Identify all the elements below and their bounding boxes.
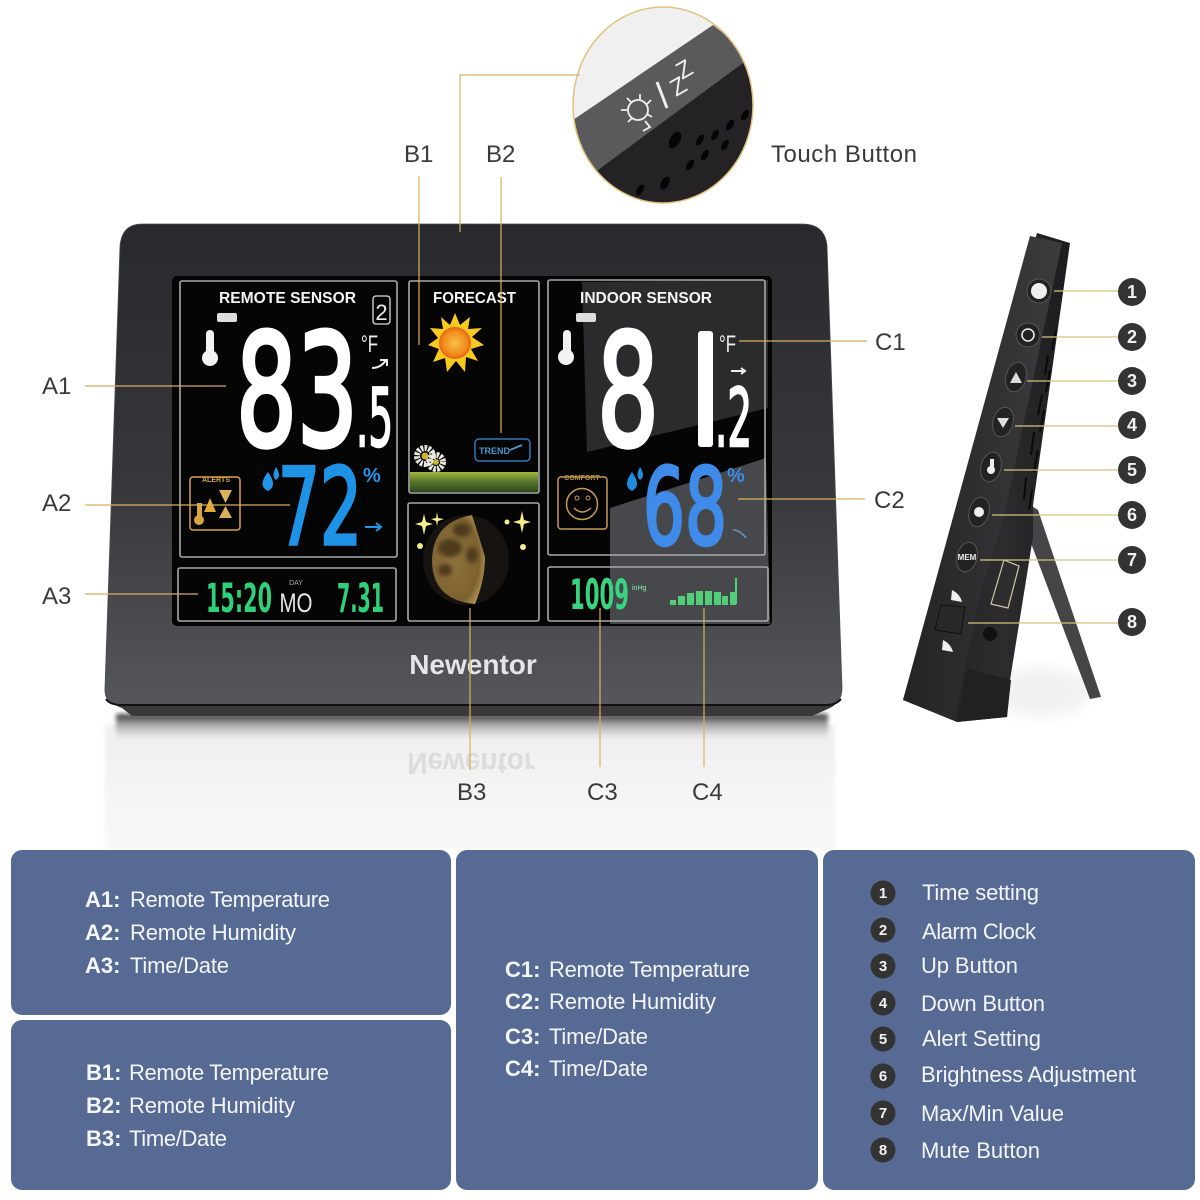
rising arrow	[372, 360, 387, 368]
icon: stars	[415, 511, 531, 550]
legend row 2: 2	[879, 922, 887, 939]
legend row 5	[870, 1026, 1041, 1052]
indoor humidity value: 68	[643, 446, 727, 569]
battery icon	[217, 313, 237, 322]
indoor temperature second digit	[698, 331, 713, 447]
button callouts	[968, 278, 1146, 636]
callout 8	[1118, 608, 1146, 636]
icon: grass	[410, 472, 538, 492]
panel: remote sensor	[180, 281, 397, 569]
legend row 5: Alert Setting	[922, 1026, 1041, 1051]
label B2: B2	[486, 141, 515, 168]
legend row 2: Alarm Clock	[922, 919, 1037, 944]
C2 row: C2:	[505, 989, 540, 1014]
day label: DAY	[289, 580, 303, 587]
callout 5: 5	[1127, 460, 1137, 480]
sleep letters	[666, 54, 698, 102]
B1 row: Remote Temperature	[129, 1060, 329, 1085]
trend icon: TREND	[479, 446, 510, 456]
C4 row: Time/Date	[549, 1056, 648, 1081]
legend row 1: Time setting	[922, 880, 1039, 905]
degree F: °F	[719, 331, 736, 358]
A1 row: A1:	[85, 887, 120, 912]
humidity drops	[627, 467, 643, 491]
label A3: A3	[42, 583, 71, 610]
button 6 brightness	[965, 495, 993, 529]
channel 2 icon	[373, 296, 390, 325]
degree F: °F	[361, 331, 378, 358]
C4 row	[505, 1056, 648, 1081]
panel: forecast	[409, 281, 539, 493]
callout 6	[1118, 501, 1146, 529]
pressure history bars	[670, 578, 737, 605]
legend row 8	[870, 1138, 1040, 1163]
stand leg	[1026, 505, 1101, 699]
mute switch	[935, 590, 965, 652]
weather station front	[105, 224, 842, 716]
side view floor shadow	[990, 668, 1090, 716]
A3 row: A3:	[85, 953, 120, 978]
steady arrow	[731, 368, 745, 374]
button 7 memory: MEM	[958, 553, 977, 562]
label A1: A1	[42, 373, 71, 400]
brand name: Newentor	[409, 649, 537, 680]
floor reflection	[105, 714, 835, 850]
button 3 up	[1002, 360, 1030, 394]
A2 row: A2:	[85, 920, 120, 945]
panel: time and date: 7.31	[337, 576, 384, 622]
percent sign: %	[363, 465, 381, 487]
callout 3: 3	[1127, 371, 1137, 391]
label A2: A2	[42, 490, 71, 517]
panel: button legend	[823, 850, 1195, 1190]
A1 row: Remote Temperature	[130, 887, 330, 912]
B3 row: Time/Date	[129, 1126, 227, 1151]
steady arrow	[365, 523, 381, 531]
device body	[105, 224, 842, 705]
speaker holes	[634, 108, 751, 197]
callout 2: 2	[1127, 327, 1137, 347]
lens contents	[574, 8, 752, 202]
label B3: B3	[457, 779, 486, 806]
legend row 6: 6	[879, 1068, 887, 1085]
legend row 3	[870, 953, 1018, 978]
legend row 3: 3	[879, 958, 887, 975]
label C3: C3	[587, 779, 618, 806]
remote sensor heading: REMOTE SENSOR	[219, 290, 356, 307]
button 1 clock	[1027, 279, 1051, 303]
legend row 4	[870, 990, 1045, 1016]
battery icon	[576, 313, 596, 322]
alerts icon	[190, 477, 240, 530]
B3 row: B3:	[86, 1126, 121, 1151]
legend row 6: Brightness Adjustment	[921, 1062, 1136, 1087]
C1 row: C1:	[505, 957, 540, 982]
callout 4	[1118, 411, 1146, 439]
button 2 alarm	[1016, 323, 1040, 347]
touch button magnifier	[572, 6, 754, 204]
percent sign: %	[727, 465, 745, 487]
legend row 7: 7	[879, 1105, 887, 1122]
B3 row	[86, 1126, 227, 1151]
icon: daisies	[417, 448, 443, 469]
A3 row	[85, 953, 229, 978]
callout 4: 4	[1127, 415, 1137, 435]
callout 2	[1118, 323, 1146, 351]
panel: pressure	[548, 567, 768, 621]
B2 row: Remote Humidity	[129, 1093, 295, 1118]
panel: C legend	[456, 850, 818, 1190]
pressure value: 1009	[570, 570, 629, 619]
icon: moon	[432, 515, 485, 604]
panel: indoor sensor	[548, 280, 765, 569]
USB port	[991, 560, 1019, 608]
callout 7: 7	[1127, 550, 1137, 570]
panel: moon phase	[408, 503, 539, 621]
comfort icon: COMFORT	[564, 475, 600, 482]
button 7 memory	[953, 540, 981, 574]
front face	[903, 236, 1062, 720]
trend icon	[475, 439, 530, 461]
forecast heading: FORECAST	[433, 290, 516, 307]
indoor temperature value: 8	[597, 301, 659, 482]
legend row 2	[870, 918, 1037, 944]
weekday: MO	[280, 588, 312, 618]
remote humidity value: 72	[278, 446, 362, 569]
side view of station	[903, 233, 1101, 722]
C2 row: Remote Humidity	[549, 989, 716, 1014]
legend row 1: 1	[879, 885, 887, 902]
C3 row: C3:	[505, 1024, 540, 1049]
screen glare	[582, 280, 770, 624]
humidity drops	[262, 467, 279, 491]
C4 row: C4:	[505, 1056, 540, 1081]
comfort icon	[558, 475, 607, 529]
falling arrow	[733, 530, 746, 538]
label C2: C2	[874, 487, 905, 514]
panel: remote sensor: .5	[356, 372, 393, 465]
button 4 down	[989, 405, 1017, 439]
lower housing band	[957, 668, 1011, 722]
panel: A legend	[11, 850, 451, 1015]
icon: dark side of moon	[423, 515, 509, 605]
channel 2 icon: 2	[375, 300, 388, 325]
legend row 7: Max/Min Value	[921, 1101, 1064, 1126]
legend row 3: Up Button	[921, 953, 1018, 978]
button 5 thermometer	[977, 450, 1005, 484]
callout lines	[85, 75, 867, 770]
legend row 1	[870, 880, 1039, 906]
callout 8: 8	[1127, 612, 1137, 632]
callout 1: 1	[1127, 282, 1137, 302]
remote temperature value: 83	[236, 301, 358, 482]
callout 1	[1118, 278, 1146, 306]
C3 row: Time/Date	[549, 1024, 648, 1049]
A2 row: Remote Humidity	[130, 920, 296, 945]
label B1: B1	[404, 141, 433, 168]
sleep letters: Z	[666, 71, 692, 102]
thermometer icon	[558, 330, 574, 365]
callout 7	[1118, 546, 1146, 574]
thermometer icon	[202, 330, 218, 366]
panel: indoor sensor: .2	[715, 372, 752, 465]
sleep letters: Z	[672, 54, 698, 85]
label C1: C1	[875, 329, 906, 356]
vents	[1024, 330, 1056, 510]
B2 row: B2:	[86, 1093, 121, 1118]
B1 row: B1:	[86, 1060, 121, 1085]
legend row 4: Down Button	[921, 991, 1045, 1016]
icon: sun	[428, 313, 484, 372]
touch button label: Touch Button	[771, 141, 917, 168]
panel: B legend	[11, 1020, 451, 1190]
icon: sun bulb	[621, 82, 667, 131]
time: 15:20	[206, 576, 272, 622]
indoor sensor heading: INDOOR SENSOR	[580, 290, 712, 307]
A3 row: Time/Date	[130, 953, 229, 978]
display screen	[172, 276, 772, 626]
back of body	[903, 233, 1070, 722]
mirrored brand: Newentor	[407, 746, 535, 780]
C3 row	[505, 1024, 648, 1049]
callout 3	[1118, 367, 1146, 395]
callout labels	[42, 141, 917, 806]
callout 6: 6	[1127, 505, 1137, 525]
C1 row: Remote Temperature	[549, 957, 750, 982]
label C4: C4	[692, 779, 723, 806]
pressure units: inHg	[632, 585, 647, 592]
callout 5	[1118, 456, 1146, 484]
alerts icon: ALERTS	[202, 477, 230, 484]
device lip	[106, 696, 841, 716]
legend row 8: 8	[879, 1142, 887, 1159]
legend row 8: Mute Button	[921, 1138, 1040, 1163]
power socket	[983, 627, 997, 641]
legend row 5: 5	[879, 1031, 887, 1048]
legend row 4: 4	[879, 995, 888, 1012]
panel: time and date	[178, 568, 396, 622]
lens rim	[573, 7, 753, 203]
